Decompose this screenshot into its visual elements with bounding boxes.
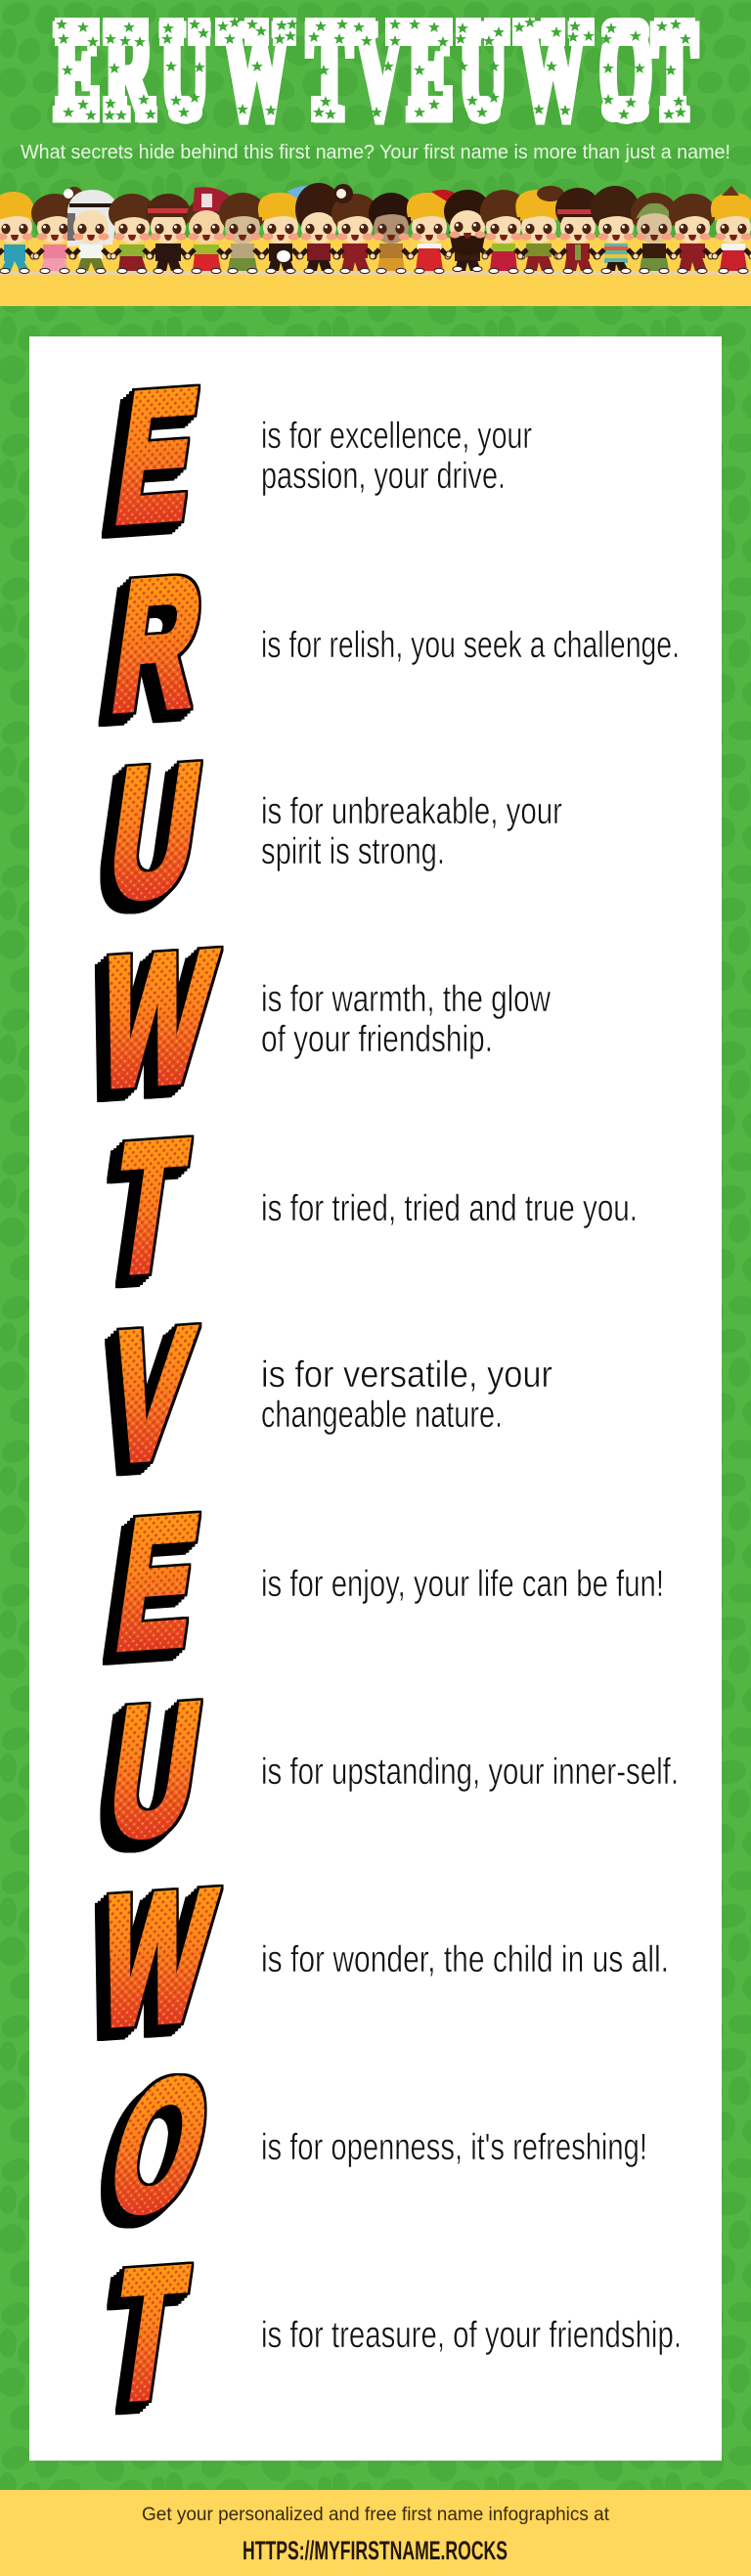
illustration: row of cartoon children — [0, 183, 751, 274]
title — [55, 0, 697, 146]
row: U unbreakable — [99, 727, 562, 937]
letter T: T — [102, 2228, 196, 2438]
footer url: HTTPS://MYFIRSTNAME.ROCKS — [243, 2536, 508, 2565]
subtitle: What secrets hide behind this first name? Your first name is more than just a name! — [21, 141, 730, 163]
letter E: E — [107, 1478, 208, 1689]
header yellow band — [0, 238, 751, 306]
letter W: W — [88, 1852, 223, 2065]
row: O openness — [92, 2038, 647, 2252]
text: excellence — [261, 416, 532, 497]
letter T: T — [102, 1101, 196, 1311]
row: V versatile — [98, 1290, 552, 1500]
panel: white name panel — [29, 336, 722, 2461]
letter O: O — [92, 2038, 228, 2252]
title star decorations — [56, 17, 691, 120]
text: versatile: is for versatile, your — [261, 1355, 552, 1396]
text: versatile: changeable nature. — [261, 1395, 503, 1436]
text: unbreakable: is for unbreakable, your — [261, 791, 562, 832]
row: R relish — [103, 539, 680, 750]
text: openness: is for openness, it's refreshing! — [261, 2127, 647, 2168]
text: excellence: is for excellence, your — [261, 416, 532, 457]
letter R: R — [103, 539, 212, 750]
row: E enjoy — [107, 1478, 664, 1689]
text: warmth: is for warmth, the glow — [261, 979, 551, 1020]
text: unbreakable: spirit is strong. — [261, 831, 445, 872]
row: E excellence — [106, 351, 532, 562]
text: excellence: passion, your drive. — [261, 456, 506, 497]
title slab shapes — [55, 18, 695, 122]
letter U: U — [99, 1666, 210, 1876]
row: T tried — [102, 1101, 638, 1311]
text: warmth — [261, 979, 551, 1060]
letter U: U — [99, 727, 210, 937]
letter W: W — [88, 913, 223, 1127]
text: versatile — [261, 1355, 552, 1436]
letter E: E — [106, 351, 207, 562]
row: U upstanding — [99, 1666, 679, 1876]
text: tried: is for tried, tried and true you. — [261, 1188, 638, 1229]
row: W warmth — [88, 913, 551, 1127]
letter V: V — [98, 1290, 201, 1500]
text: unbreakable — [261, 791, 562, 872]
row: W wonder — [88, 1852, 669, 2065]
row: T treasure — [102, 2228, 682, 2438]
text: warmth: of your friendship. — [261, 1019, 493, 1060]
footer band — [0, 2490, 751, 2576]
footer text: Get your personalized and free first name infographics at — [142, 2505, 610, 2525]
